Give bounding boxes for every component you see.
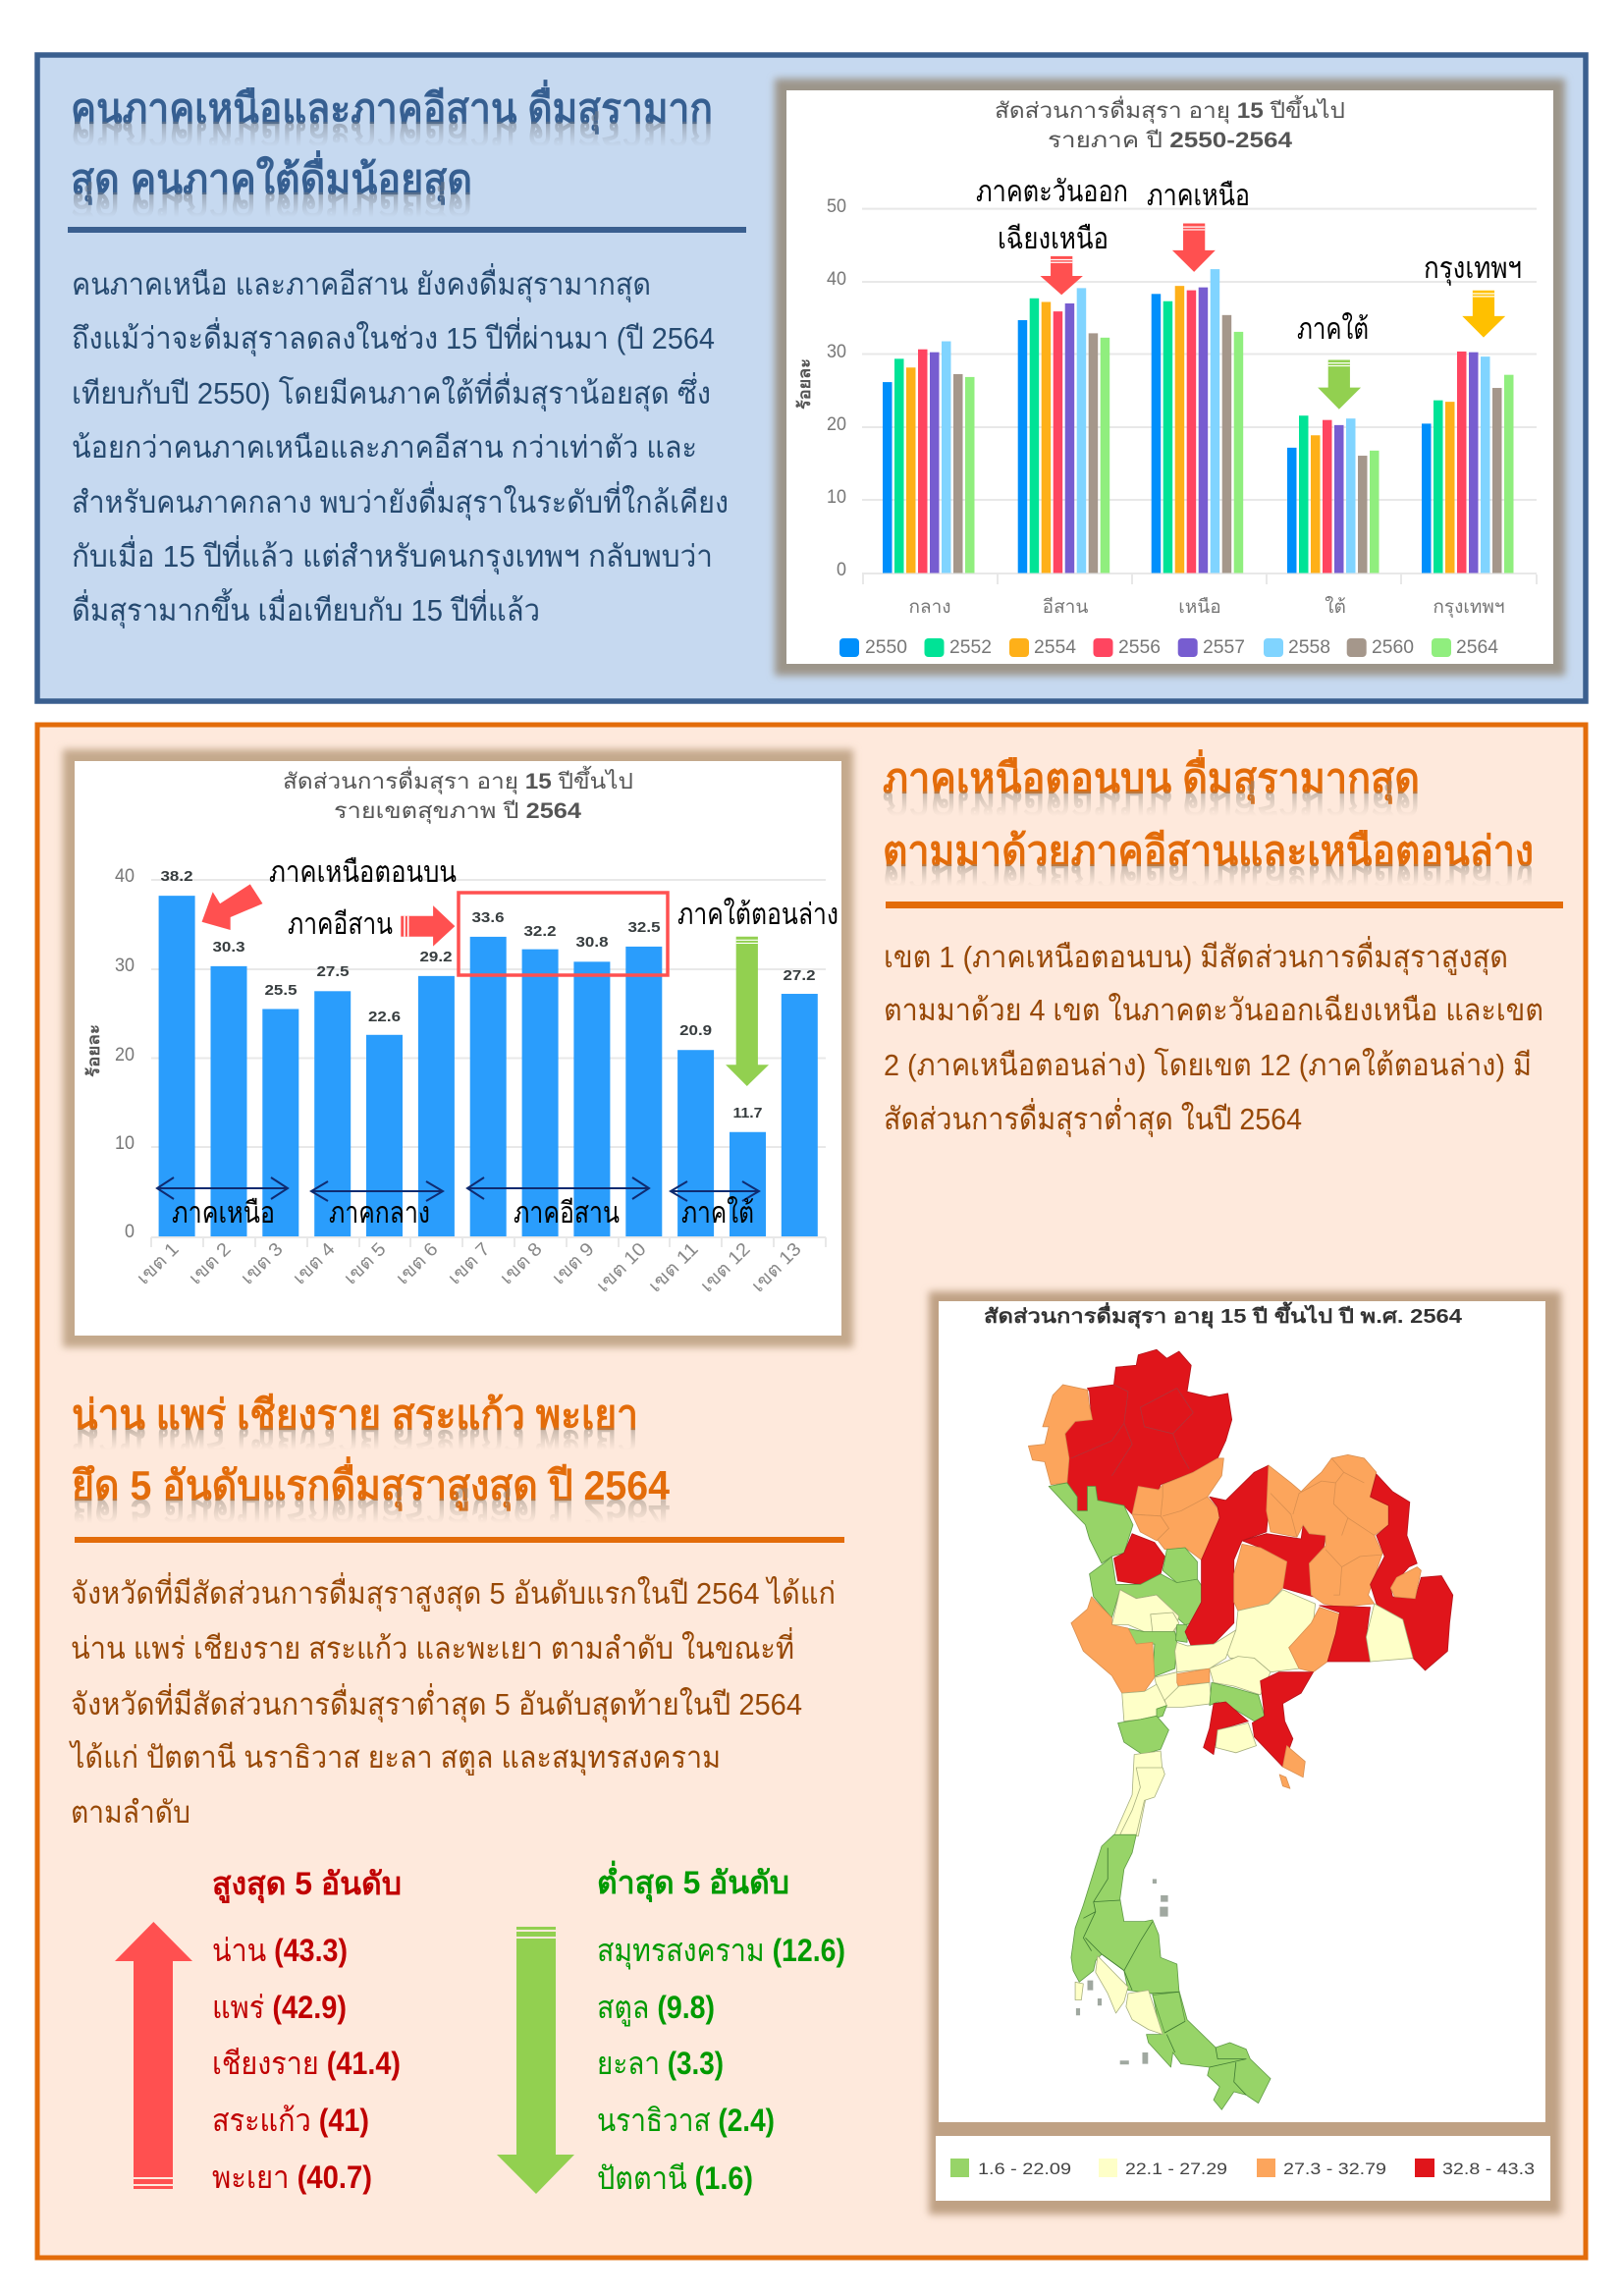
- data labels: 32.5: [628, 919, 660, 936]
- list: top five lowest: [597, 1860, 845, 2196]
- list: top five highest: พะเยา (40.7): [212, 2159, 372, 2195]
- y axis labels: 20: [115, 1045, 135, 1066]
- x axis labels: เขต 11: [645, 1239, 703, 1296]
- chart title: สัดส่วนการดื่มสุรา อายุ 15 ปีขึ้นไป: [283, 766, 633, 794]
- y axis labels: 40: [827, 269, 846, 290]
- bars: [159, 896, 818, 1236]
- y axis labels: [84, 866, 135, 1242]
- annotation labels: [976, 176, 1522, 346]
- text block: north and northeast summary: สำหรับคนภาคกลาง พบว่ายังดื่มสุราในระดับที่ใกล้เคียง: [72, 481, 729, 521]
- annotation labels: ภาคกลาง: [329, 1197, 430, 1230]
- highlight box: Isan regions: [459, 893, 668, 975]
- map panel: Thailand choropleth: [929, 1291, 1561, 2214]
- heading: upper north highest: ภาคเหนือตอนบน ดื่มสุรามากสุด: [883, 781, 1420, 836]
- annotation labels: [172, 856, 839, 1230]
- heading: top five provinces: น่าน แพร่ เชียงราย สระแก้ว พะเยา: [72, 1420, 638, 1466]
- region range arrows: [157, 1177, 759, 1201]
- x axis labels: เขต 6: [393, 1239, 443, 1289]
- text block: health region summary: ตามมาด้วย 4 เขต ในภาคตะวันออกเฉียงเหนือ และเขต: [884, 993, 1543, 1027]
- category labels: ใต้: [1325, 596, 1346, 618]
- legend: [839, 637, 1498, 658]
- list: top five highest: สูงสุด 5 อันดับ: [212, 1866, 402, 1904]
- data labels: 33.6: [471, 909, 505, 926]
- heading: north and northeast drink most: คนภาคเหนือและภาคอีสาน ดื่มสุรามาก: [71, 111, 713, 166]
- text block: health region summary: [884, 936, 1543, 1138]
- x axis labels: เขต 5: [341, 1239, 391, 1289]
- annotation labels: ภาคใต้: [681, 1196, 754, 1230]
- chart title: รายภาค ปี 2550-2564: [1048, 128, 1293, 152]
- heading: top five provinces: [72, 1392, 844, 1543]
- text block: north and northeast summary: [72, 263, 729, 629]
- y axis labels: ร้อยละ: [84, 1024, 103, 1077]
- legend: 27.3 - 32.79: [1283, 2159, 1386, 2178]
- data labels: 20.9: [679, 1022, 712, 1039]
- annotation labels: ภาคอีสาน: [514, 1197, 620, 1230]
- annotation labels: ภาคเหนือ: [172, 1197, 275, 1230]
- data labels: 27.2: [784, 967, 815, 984]
- arrow: northeast: [1040, 256, 1083, 295]
- arrow: north: [1172, 224, 1216, 272]
- legend: 2557: [1203, 637, 1245, 658]
- list: top five lowest: สมุทรสงคราม (12.6): [597, 1933, 845, 1970]
- text block: health region summary: เขต 1 (ภาคเหนือตอนบน) มีสัดส่วนการดื่มสุราสูงสุด: [884, 936, 1508, 976]
- arrow: south: [1318, 360, 1361, 410]
- y axis labels: 10: [115, 1133, 135, 1154]
- legend: 32.8 - 43.3: [1442, 2159, 1535, 2178]
- list: top five highest: น่าน (43.3): [212, 1933, 348, 1968]
- bars: north: [1152, 269, 1243, 574]
- data labels: [161, 868, 815, 1121]
- text block: province summary: น่าน แพร่ เชียงราย สระแก้ว และพะเยา ตามลำดับ ในขณะที่: [71, 1627, 794, 1666]
- y axis labels: 50: [827, 196, 846, 217]
- data labels: 25.5: [265, 982, 297, 999]
- y axis labels: 30: [115, 956, 135, 976]
- annotation labels: เฉียงเหนือ: [998, 223, 1109, 255]
- chart: drinking share by region 2550-2564: [775, 79, 1565, 676]
- x axis labels: เขต 4: [290, 1238, 340, 1289]
- panel: north and northeast regions: [37, 55, 1586, 701]
- text block: province summary: จังหวัดที่มีสัดส่วนการดื่มสุราต่ำสุด 5 อันดับสุดท้ายในปี 2564: [71, 1683, 802, 1723]
- heading: north and northeast drink most: สุด คนภาคใต้ดื่มน้อยสุด: [71, 182, 472, 237]
- list: top five lowest: ต่ำสุด 5 อันดับ: [597, 1860, 789, 1903]
- text block: north and northeast summary: น้อยกว่าคนภาคเหนือและภาคอีสาน กว่าเท่าตัว และ: [72, 430, 697, 465]
- data labels: 38.2: [161, 868, 192, 885]
- annotation labels: ภาคตะวันออก: [976, 176, 1128, 208]
- bars: central: [883, 342, 974, 574]
- legend: 2564: [1456, 637, 1498, 658]
- arrow: down green: [497, 1927, 574, 2194]
- heading: north and northeast drink most: คนภาคเหนือและภาคอีสาน ดื่มสุรามาก: [71, 80, 713, 135]
- x axis labels: เขต 1: [134, 1239, 184, 1289]
- map: southern Thailand: [1071, 1768, 1271, 2109]
- chart title: สัดส่วนการดื่มสุรา อายุ 15 ปีขึ้นไป: [995, 95, 1345, 124]
- data labels: 27.5: [316, 963, 350, 980]
- x axis labels: เขต 12: [697, 1239, 755, 1296]
- data labels: 29.2: [420, 949, 452, 965]
- x axis labels: เขต 13: [748, 1239, 806, 1296]
- list: top five lowest: สตูล (9.8): [597, 1990, 715, 2027]
- list: top five lowest: นราธิวาส (2.4): [597, 2103, 775, 2138]
- y axis labels: 0: [125, 1222, 135, 1242]
- data labels: 30.3: [212, 939, 245, 956]
- data labels: 32.2: [524, 923, 556, 940]
- text block: health region summary: สัดส่วนการดื่มสุราต่ำสุด ในปี 2564: [884, 1098, 1302, 1138]
- annotation labels: ภาคเหนือตอนบน: [269, 856, 457, 889]
- heading: upper north highest: ตามมาด้วยภาคอีสานและเหนือตอนล่าง: [883, 856, 1534, 902]
- text block: province summary: ตามลำดับ: [71, 1795, 190, 1830]
- heading: upper north highest: ภาคเหนือตอนบน ดื่มสุรามากสุด: [883, 749, 1420, 804]
- category labels: อีสาน: [1043, 596, 1088, 618]
- annotation labels: ภาคเหนือ: [1147, 180, 1250, 212]
- x axis labels: [134, 1238, 806, 1296]
- x axis labels: เขต 9: [549, 1239, 599, 1289]
- chart title: [995, 95, 1345, 152]
- x axis labels: เขต 8: [497, 1239, 547, 1289]
- bars: Bangkok: [1422, 352, 1514, 574]
- legend: 22.1 - 27.29: [1125, 2159, 1227, 2178]
- chart: drinking share by health region 2564: [63, 749, 853, 1347]
- list: top five lowest: ปัตตานี (1.6): [597, 2160, 753, 2196]
- list: top five highest: [212, 1866, 402, 2195]
- arrow: Bangkok: [1462, 291, 1505, 338]
- text block: north and northeast summary: เทียบกับปี 2550) โดยมีคนภาคใต้ที่ดื่มสุราน้อยสุด ซึ่ง: [72, 372, 711, 412]
- legend: 2554: [1034, 637, 1076, 658]
- text block: province summary: ได้แก่ ปัตตานี นราธิวาส ยะลา สตูล และสมุทรสงคราม: [68, 1740, 721, 1777]
- list: top five highest: แพร่ (42.9): [212, 1990, 347, 2025]
- text block: health region summary: 2 (ภาคเหนือตอนล่าง) โดยเขต 12 (ภาคใต้ตอนล่าง) มี: [884, 1048, 1532, 1082]
- data labels: 30.8: [575, 934, 609, 951]
- x axis labels: เขต 10: [593, 1239, 651, 1296]
- arrow: upper north: [202, 884, 267, 930]
- legend: 2560: [1372, 637, 1414, 658]
- heading: top five provinces: น่าน แพร่ เชียงราย สระแก้ว พะเยา: [72, 1392, 638, 1438]
- category labels: [908, 596, 1505, 619]
- text block: north and northeast summary: ถึงแม้ว่าจะดื่มสุราลดลงในช่วง 15 ปีที่ผ่านมา (ปี 2564: [72, 317, 715, 357]
- x axis labels: เขต 3: [238, 1239, 288, 1289]
- heading: north and northeast drink most: สุด คนภาคใต้ดื่มน้อยสุด: [71, 150, 472, 205]
- panel: health regions and provinces: [37, 725, 1586, 2258]
- heading: upper north highest: ตามมาด้วยภาคอีสานและเหนือตอนล่าง: [883, 828, 1534, 874]
- text block: province summary: [68, 1572, 836, 1830]
- heading: upper north highest: [883, 749, 1563, 908]
- text block: north and northeast summary: ดื่มสุรามากขึ้น เมื่อเทียบกับ 15 ปีที่แล้ว: [72, 588, 540, 629]
- y axis labels: 30: [827, 342, 846, 362]
- map title: สัดส่วนการดื่มสุรา อายุ 15 ปี ขึ้นไป ปี พ.ศ. 2564: [984, 1301, 1463, 1329]
- arrow: lower south: [726, 937, 769, 1086]
- chart title: รายเขตสุขภาพ ปี 2564: [334, 798, 582, 824]
- legend: [950, 2159, 1535, 2178]
- text block: province summary: จังหวัดที่มีสัดส่วนการดื่มสุราสูงสุด 5 อันดับแรกในปี 2564 ได้แก่: [71, 1572, 836, 1613]
- y axis labels: 40: [115, 866, 135, 887]
- annotation labels: กรุงเทพฯ: [1424, 252, 1522, 287]
- annotation labels: ภาคอีสาน: [288, 908, 393, 941]
- legend: 2558: [1288, 637, 1330, 658]
- category labels: กรุงเทพฯ: [1433, 597, 1505, 619]
- bars: northeast: [1018, 288, 1109, 574]
- data labels: 22.6: [368, 1009, 401, 1025]
- legend: 2556: [1118, 637, 1161, 658]
- y axis labels: ร้อยละ: [795, 358, 814, 410]
- list: top five highest: สระแก้ว (41): [212, 2103, 369, 2138]
- heading: north and northeast drink most: [68, 80, 746, 237]
- x axis labels: เขต 2: [186, 1239, 236, 1289]
- y axis labels: 0: [837, 560, 846, 580]
- x axis labels: เขต 7: [445, 1239, 495, 1289]
- annotation labels: ภาคใต้: [1297, 312, 1369, 346]
- annotation labels: ภาคใต้ตอนล่าง: [677, 898, 839, 931]
- text block: north and northeast summary: คนภาคเหนือ และภาคอีสาน ยังคงดื่มสุรามากสุด: [72, 263, 651, 303]
- arrow: up red: [115, 1922, 192, 2189]
- y axis labels: 20: [827, 414, 846, 435]
- y axis labels: 10: [827, 487, 846, 508]
- list: top five highest: เชียงราย (41.4): [212, 2046, 401, 2081]
- category labels: กลาง: [908, 597, 951, 618]
- chart title: [283, 766, 633, 824]
- heading: top five provinces: ยึด 5 อันดับแรกดื่มสุราสูงสุด ปี 2564: [72, 1456, 671, 1511]
- list: top five lowest: ยะลา (3.3): [597, 2046, 724, 2081]
- bars: south: [1287, 415, 1379, 574]
- data labels: 11.7: [732, 1105, 762, 1121]
- legend: 2550: [865, 637, 907, 658]
- text block: north and northeast summary: กับเมื่อ 15 ปีที่แล้ว แต่สำหรับคนกรุงเทพฯ กลับพบว่า: [72, 535, 713, 575]
- legend: 2552: [949, 637, 992, 658]
- heading: top five provinces: ยึด 5 อันดับแรกดื่มสุราสูงสุด ปี 2564: [72, 1488, 671, 1543]
- category labels: เหนือ: [1178, 597, 1221, 618]
- y axis labels: [795, 196, 846, 580]
- legend: 1.6 - 22.09: [978, 2159, 1071, 2178]
- map: upper Thailand: [1028, 1349, 1453, 1836]
- arrow: Isan: [401, 905, 455, 947]
